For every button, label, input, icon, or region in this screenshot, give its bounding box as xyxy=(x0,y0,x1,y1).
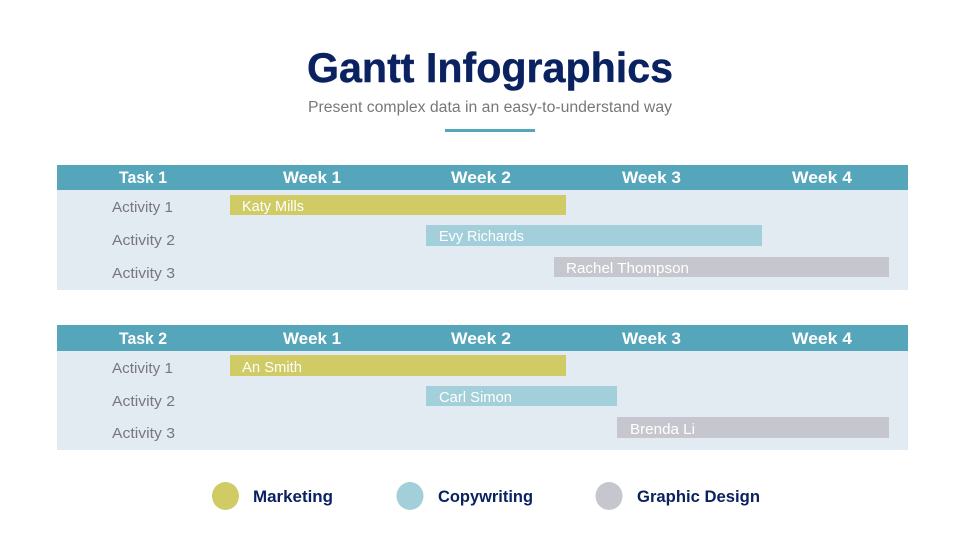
title accent rule xyxy=(445,129,535,132)
task 1 header row: Week 2 xyxy=(451,168,511,187)
task 1 header row: Week 4 xyxy=(792,168,853,187)
legend item: Copywriting xyxy=(396,482,533,510)
bar: Brenda Li xyxy=(617,417,889,438)
legend item: Marketing xyxy=(212,482,333,510)
legend item: Marketing: Marketing xyxy=(253,487,333,506)
bar: Rachel Thompson: Rachel Thompson xyxy=(566,261,689,277)
task 1 activity labels xyxy=(112,200,175,282)
task 2 header row: Week 4 xyxy=(792,329,853,348)
task 2 activity labels: Activity 3 xyxy=(112,426,175,442)
bar: Carl Simon: Carl Simon xyxy=(439,390,512,406)
bar: Katy Mills: Katy Mills xyxy=(242,199,304,215)
task 2 header row xyxy=(57,325,908,351)
subtitle: Present complex data in an easy-to-understand way xyxy=(308,99,672,116)
task 2 header row: Task 2 xyxy=(119,329,167,348)
bar: Brenda Li: Brenda Li xyxy=(630,422,695,438)
task 1 activity labels: Activity 2 xyxy=(112,233,175,249)
task 1 activity labels: Activity 1 xyxy=(112,200,173,216)
task 2 activity labels xyxy=(112,361,175,442)
task 1 activity labels: Activity 3 xyxy=(112,266,175,282)
task 2 header row: Week 2 xyxy=(451,329,511,348)
panel: task 1 gantt table xyxy=(57,165,908,290)
legend item: Graphic Design xyxy=(596,482,760,510)
bar: Carl Simon xyxy=(426,386,617,406)
task 2 header row: Week 3 xyxy=(622,329,681,348)
legend xyxy=(212,482,760,510)
task 2 header row: Week 1 xyxy=(283,329,341,348)
task 1 header row: Week 3 xyxy=(622,168,681,187)
task 1 header row xyxy=(57,165,908,190)
task 1 header row: Task 1 xyxy=(119,168,167,187)
bar: Katy Mills xyxy=(230,195,566,215)
task 1 table body xyxy=(57,190,908,290)
bar: Evy Richards: Evy Richards xyxy=(439,229,524,245)
legend item: Copywriting: Copywriting xyxy=(438,487,533,506)
task 1 header row: Week 1 xyxy=(283,168,341,187)
bar: An Smith xyxy=(230,355,566,376)
title: Gantt Infographics xyxy=(307,44,673,91)
panel: task 2 gantt table xyxy=(57,325,908,450)
bar: An Smith: An Smith xyxy=(242,360,302,376)
legend item: Graphic Design: Graphic Design xyxy=(637,487,760,506)
task 2 activity labels: Activity 2 xyxy=(112,394,175,410)
task 2 table body xyxy=(57,351,908,450)
bar: Evy Richards xyxy=(426,225,762,246)
bar: Rachel Thompson xyxy=(554,257,889,277)
task 2 activity labels: Activity 1 xyxy=(112,361,173,377)
